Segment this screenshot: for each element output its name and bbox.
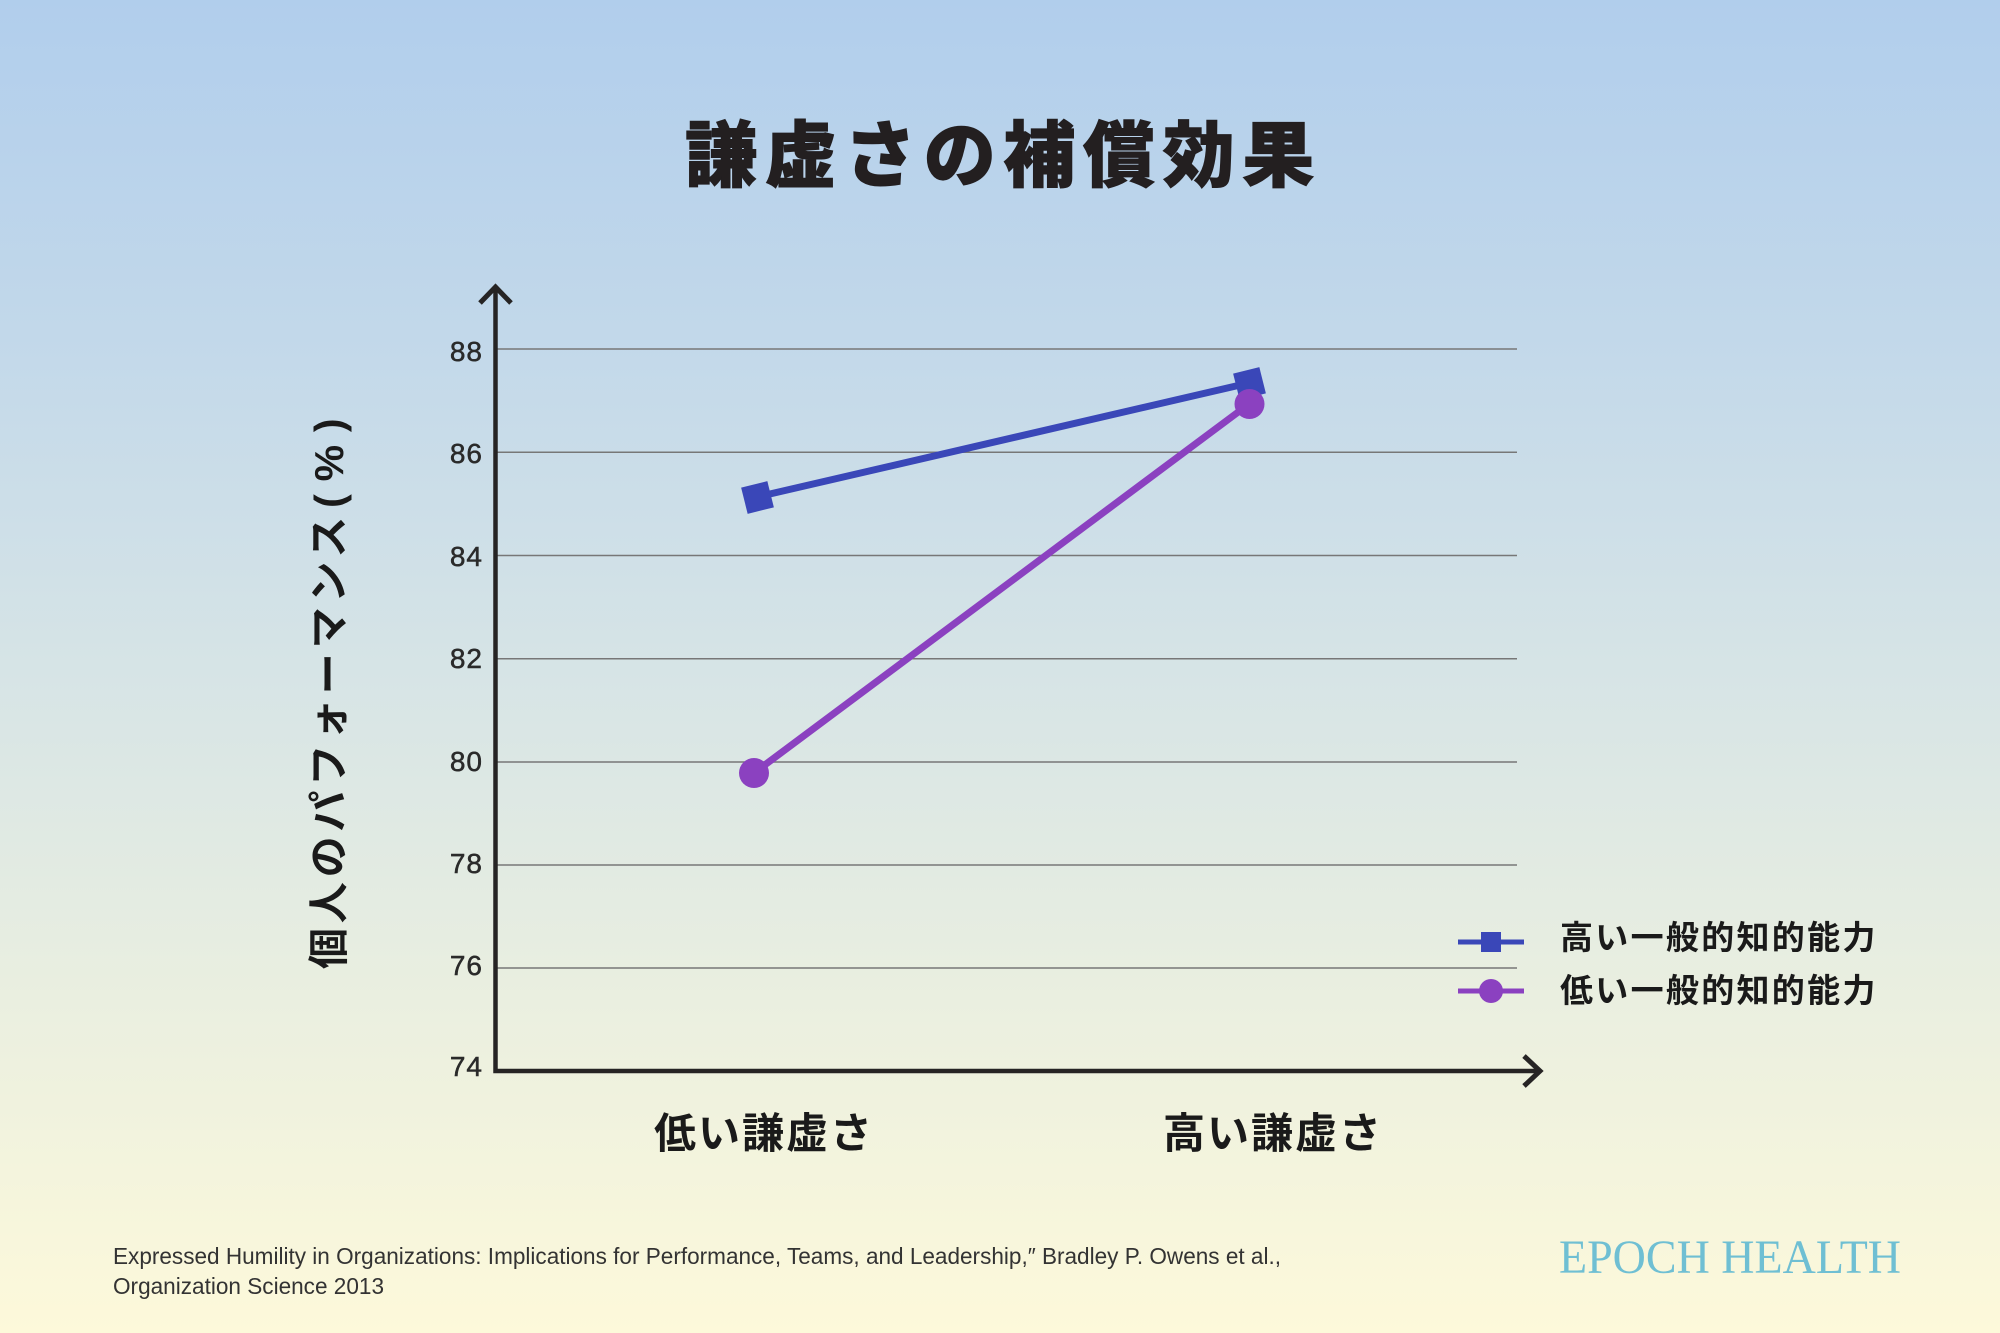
y-axis tick labels: 86 — [450, 438, 483, 469]
source citation: Expressed Humility in Organizations: Implications for Performance, Teams, and Leadership,″ Bradley P. Owens et al., — [113, 1243, 1281, 1269]
legend — [1458, 919, 1878, 1009]
y-axis tick labels: 80 — [450, 746, 483, 777]
y-axis tick labels: 84 — [450, 541, 483, 572]
y-axis tick labels: 74 — [450, 1051, 483, 1082]
y-axis tick labels: 76 — [450, 950, 483, 981]
y-axis tick labels: 88 — [450, 336, 483, 367]
y-axis title: 個人のパフォーマンス(%) — [306, 414, 352, 969]
legend item: high: 高い一般的知的能力 — [1560, 919, 1878, 956]
source citation: Organization Science 2013 — [113, 1273, 384, 1299]
series: low general mental ability — [739, 389, 1264, 788]
series: high general mental ability — [741, 367, 1266, 514]
chart — [450, 287, 1540, 1086]
x-axis label: low humility: 低い謙虚さ — [654, 1110, 874, 1157]
y-axis tick labels: 82 — [450, 643, 483, 674]
title: 謙虚さの補償効果 — [685, 117, 1322, 197]
axes with arrows — [480, 287, 1540, 1086]
y-axis tick labels: 78 — [450, 848, 483, 879]
source citation — [113, 1243, 1281, 1299]
logo: EPOCH HEALTH: EPOCH HEALTH — [1559, 1231, 1901, 1284]
legend item: low: 低い一般的知的能力 — [1560, 972, 1878, 1009]
y-axis tick labels — [450, 336, 483, 1082]
x-axis label: high humility: 高い謙虚さ — [1163, 1110, 1383, 1157]
